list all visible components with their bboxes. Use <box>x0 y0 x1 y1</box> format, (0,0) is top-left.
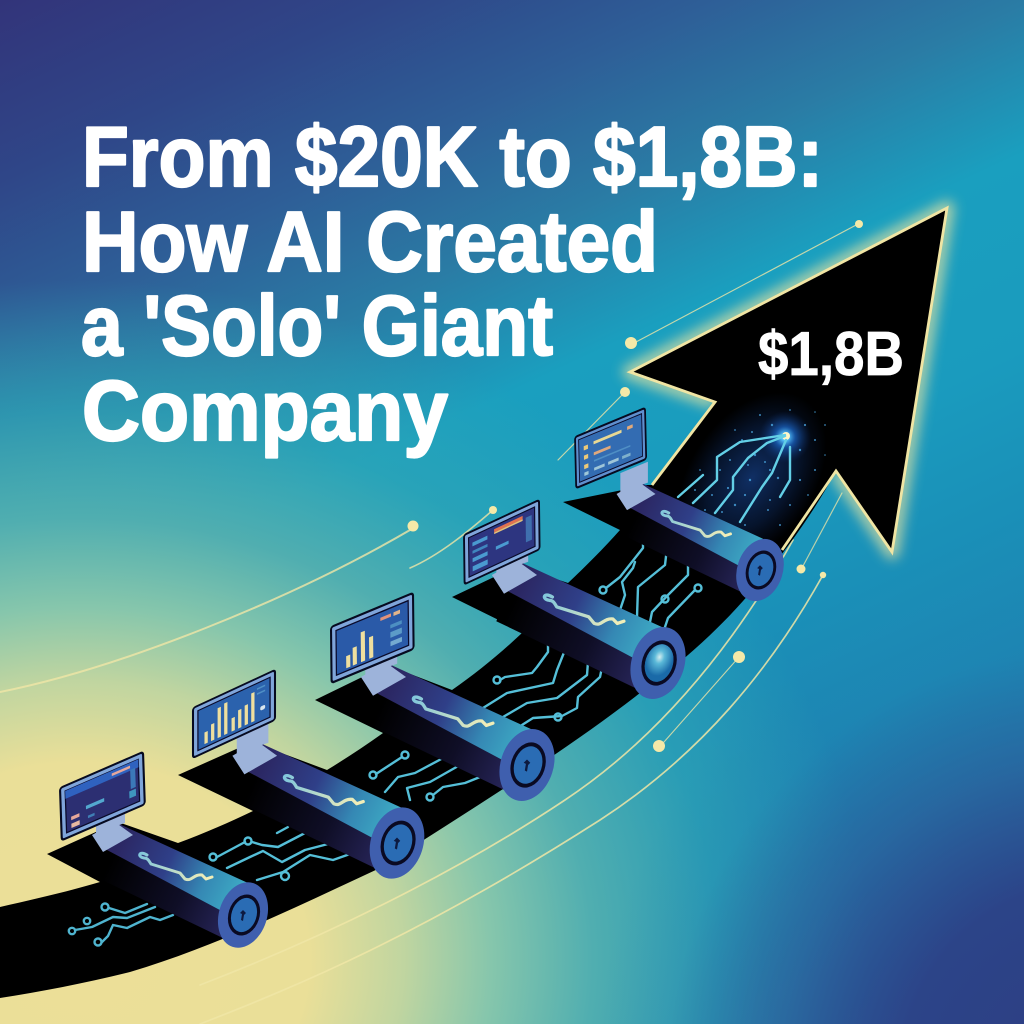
roller 4 <box>492 538 694 706</box>
roller 3 <box>361 640 563 808</box>
traces: arrow head <box>678 435 790 522</box>
traces: section 2 <box>370 752 485 800</box>
monitor 2 <box>193 670 275 758</box>
monitor 4 <box>464 500 540 584</box>
traces: section 4 <box>600 540 702 627</box>
roller 2 <box>232 719 433 886</box>
title <box>81 110 823 459</box>
traces: section 1b <box>210 827 350 880</box>
monitor 1 <box>60 752 145 840</box>
circuit traces <box>69 435 790 946</box>
spark of light <box>647 365 857 591</box>
monitor 5 <box>575 408 646 488</box>
roller 5 <box>617 462 792 607</box>
traces: section 3 <box>483 642 602 725</box>
background streak lines and nodes <box>0 220 863 1024</box>
title: Company <box>82 364 448 459</box>
title: From $20K to $1,8B: <box>82 110 823 205</box>
growth arrow <box>0 208 947 998</box>
title: How AI Created <box>82 195 658 290</box>
traces: section 1 <box>69 904 173 946</box>
arrow head glow <box>630 208 947 552</box>
value label: $1,8B <box>758 320 904 389</box>
roller 1 <box>92 801 276 954</box>
arrow head outline <box>630 208 947 552</box>
monitor 3 <box>331 593 414 683</box>
title: a 'Solo' Giant <box>81 279 553 374</box>
